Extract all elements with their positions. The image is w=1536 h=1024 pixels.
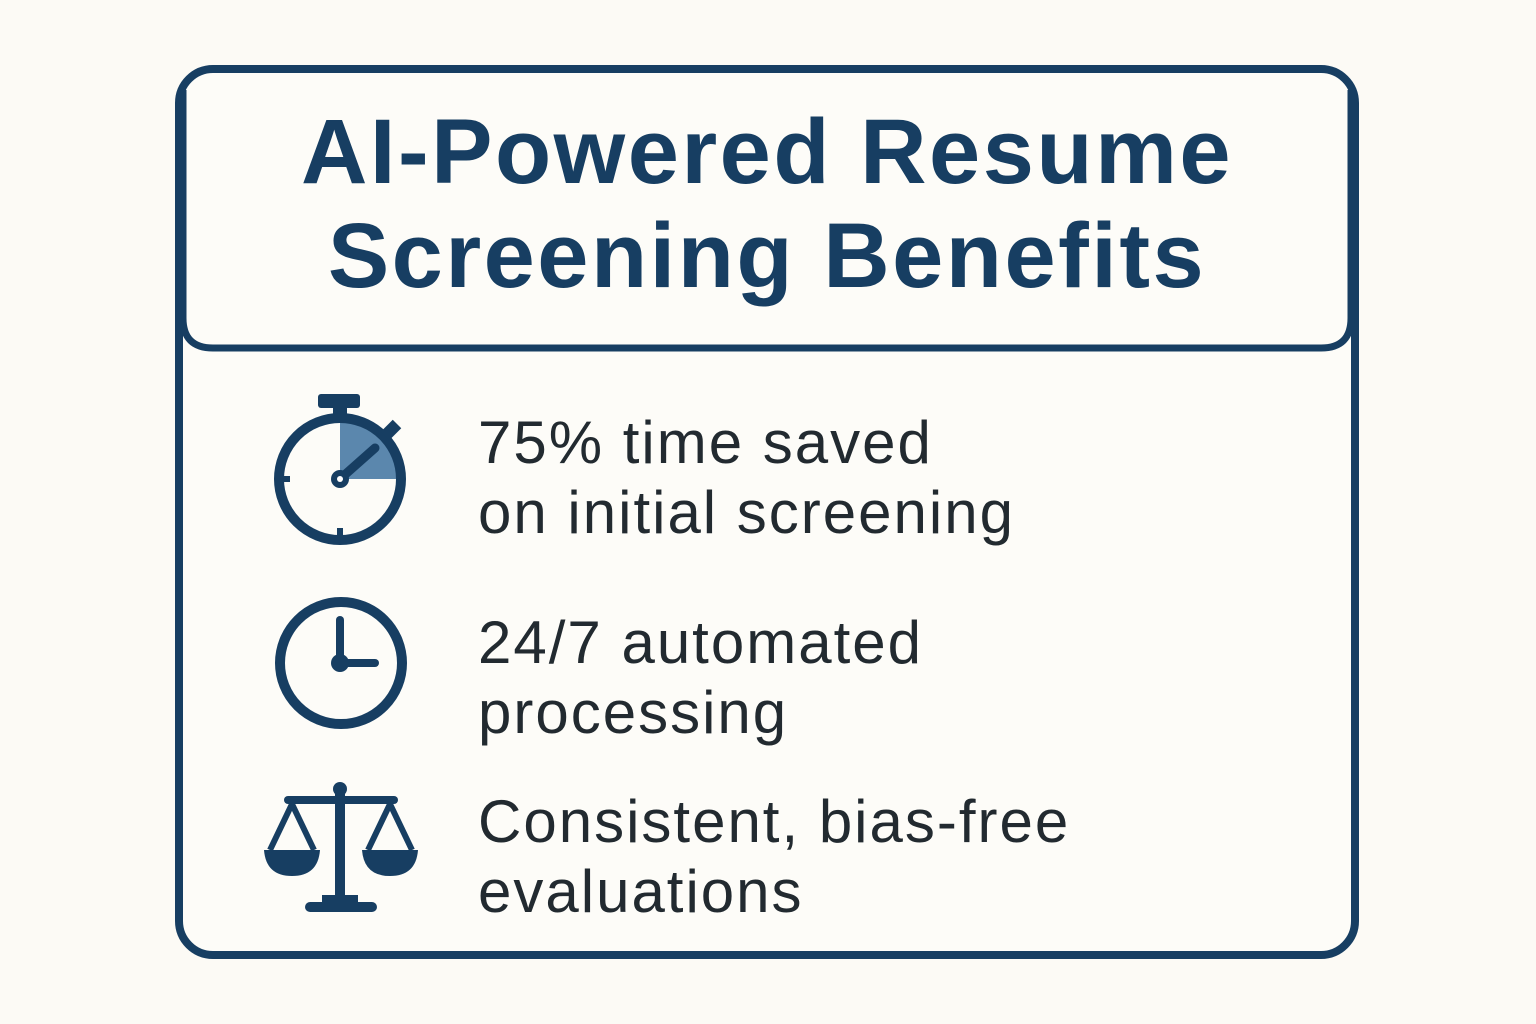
title: Screening Benefits — [328, 205, 1206, 307]
title: AI-Powered Resume — [301, 101, 1233, 203]
icon: scales — [264, 782, 418, 912]
text: 24/7 — [478, 609, 923, 746]
text: time saved: on initial screening — [478, 479, 1015, 546]
icon: stopwatch — [274, 394, 406, 545]
text: bias-free: evaluations — [478, 858, 804, 925]
text: bias-free — [478, 788, 1070, 925]
text: 24/7: 24/7 automated — [478, 609, 923, 676]
icon: clock — [275, 597, 407, 729]
text: time saved: 75% time saved — [478, 409, 933, 476]
text: bias-free: Consistent, bias-free — [478, 788, 1070, 855]
text: time saved — [478, 409, 1015, 546]
title — [301, 101, 1233, 307]
text: 24/7: processing — [478, 679, 788, 746]
